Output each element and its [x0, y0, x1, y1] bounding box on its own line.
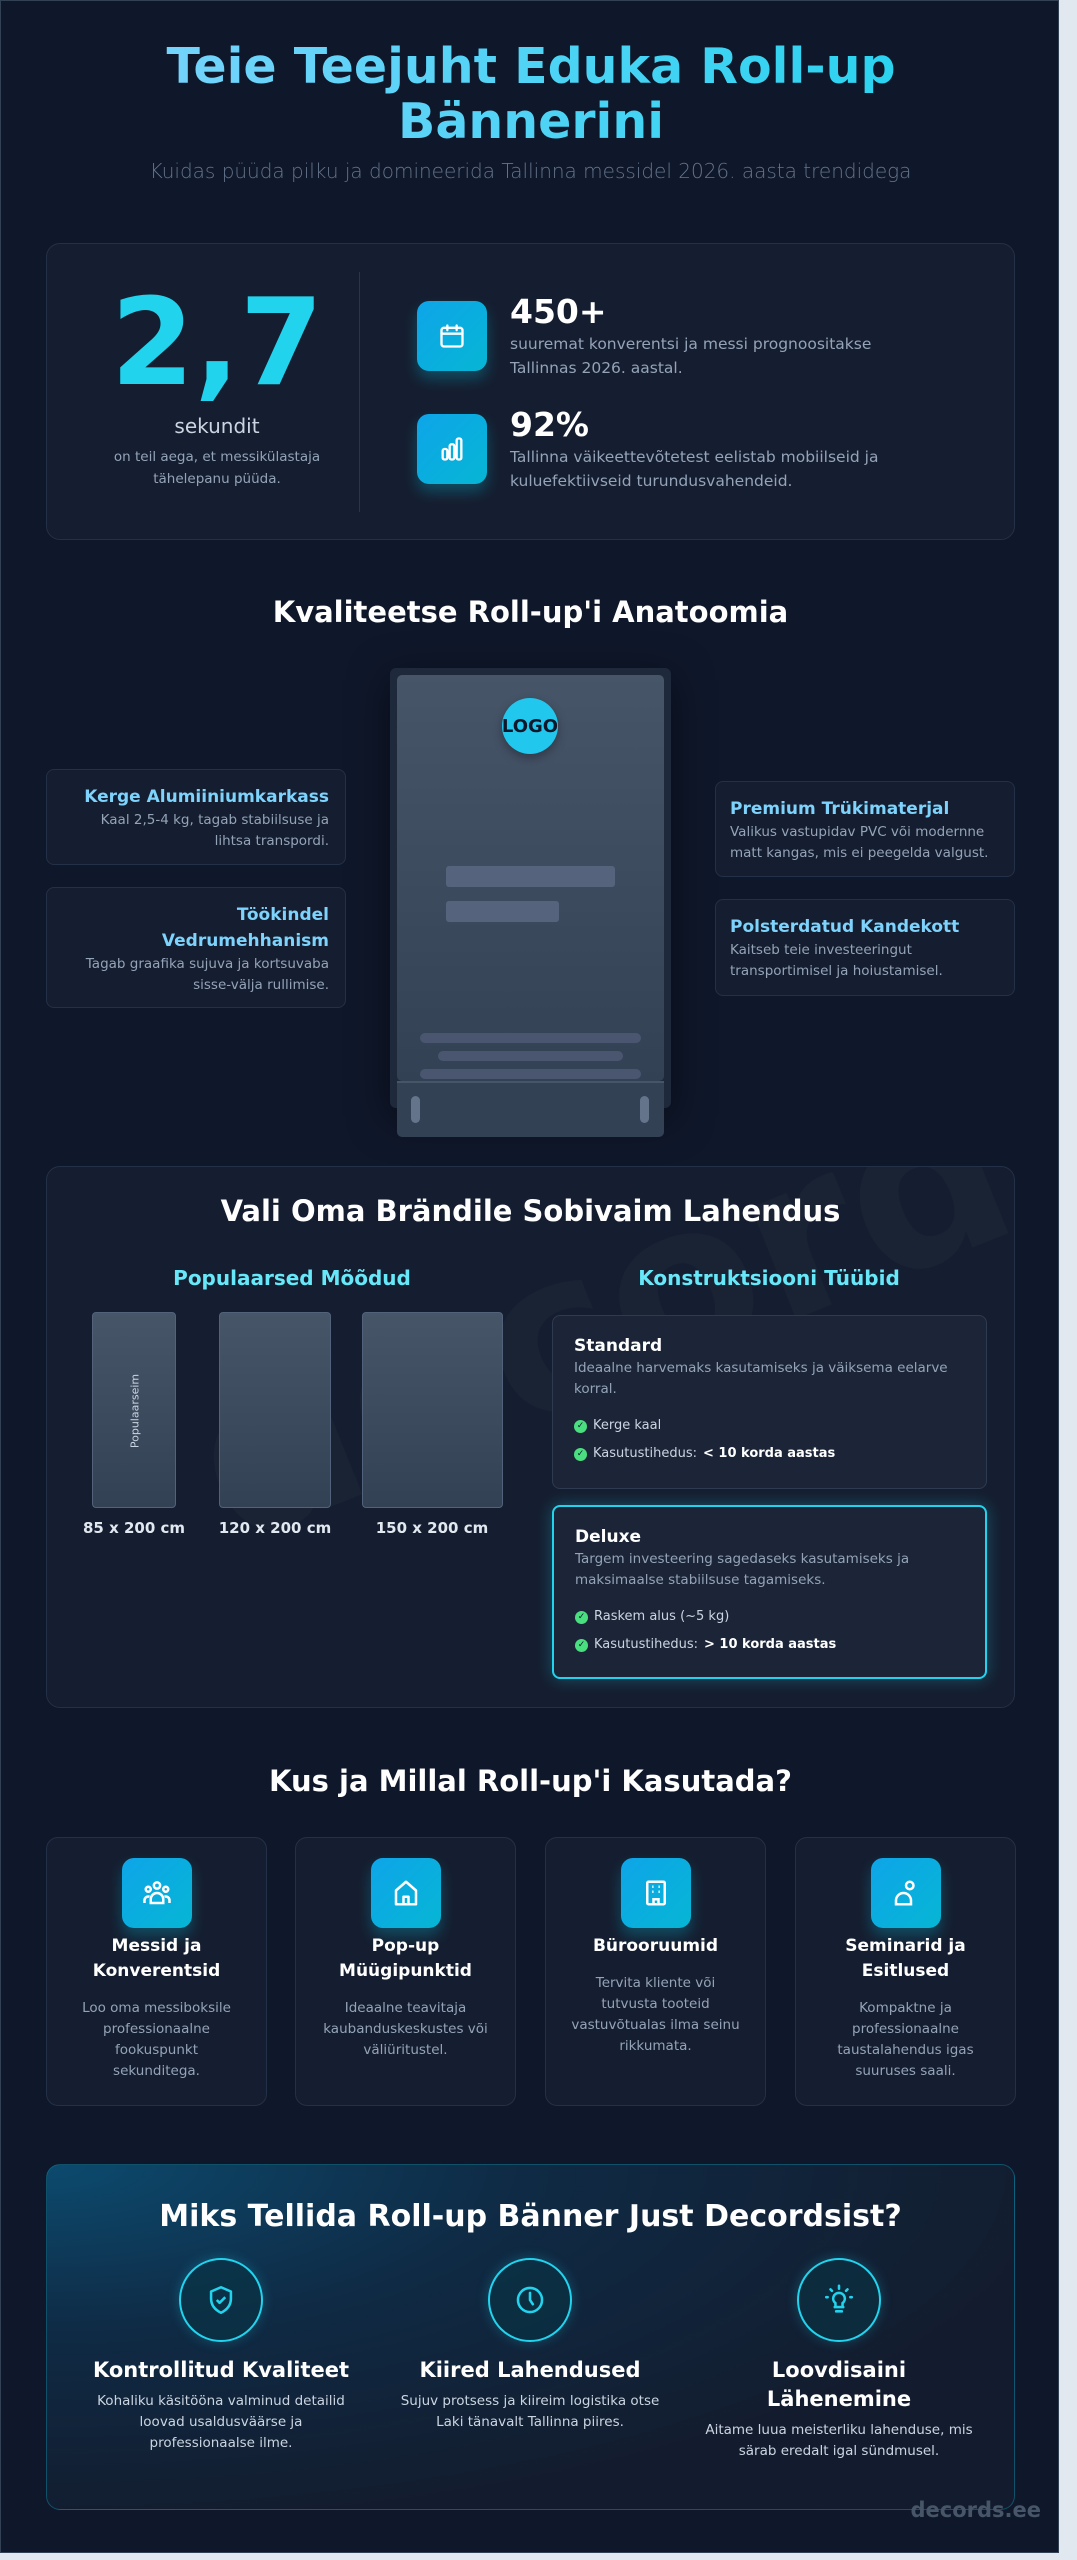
- card: fairs: Messid ja Konverentsid: [93, 1936, 220, 1981]
- stat 92%: kuluefektiivseid turundusvahendeid.: [510, 472, 792, 490]
- card: fairs: Loo oma messiboksile professionaalne fookuspunkt sekunditega.: [82, 2000, 231, 2079]
- stat 450+: [510, 292, 871, 377]
- chart: size 150: [362, 1312, 503, 1508]
- card: deluxe: ✓: [578, 1612, 585, 1622]
- chart: size 85: [92, 1312, 176, 1508]
- feature: quality: [93, 2254, 349, 2451]
- callout: spring mechanism: Töökindel Vedrumehhanism: [162, 905, 329, 951]
- feature: quality: Kohaliku käsitööna valminud detailid loovad usaldusväärse ja professionaalse ilme.: [97, 2393, 345, 2451]
- callout: carry bag: [715, 899, 1015, 996]
- label: 120: 120 x 200 cm: [219, 1519, 331, 1537]
- callout: aluminium frame: Kerge Alumiiniumkarkass: [84, 787, 329, 807]
- card: pop-up: Ideaalne teavitaja kaubanduskeskustes või väliüritustel.: [323, 2000, 488, 2058]
- subtitle: Kuidas püüda pilku ja domineerida Tallinna messidel 2026. aasta trendidega: [150, 159, 911, 183]
- card: standard: ✓: [577, 1421, 584, 1431]
- label: 150: 150 x 200 cm: [376, 1519, 488, 1537]
- card: standard: [552, 1315, 987, 1489]
- feature: creative: Aitame luua meisterliku lahenduse, mis särab eredalt igal sündmusel.: [705, 2422, 973, 2459]
- card: seminars: Seminarid ja Esitlused: [845, 1936, 966, 1981]
- heading: where to use: Kus ja Millal Roll-up'i Kasutada?: [269, 1764, 792, 1798]
- footer: brand: decords.ee: [910, 2498, 1041, 2522]
- heading: why decords: Miks Tellida Roll-up Bänner Just Decordsist?: [159, 2199, 902, 2234]
- card: standard: < 10 korda aastas: [703, 1446, 835, 1461]
- feature: quality: Kontrollitud Kvaliteet: [93, 2358, 349, 2382]
- callout: print material: Valikus vastupidav PVC või modernne matt kangas, mis ei peegelda valgust.: [730, 824, 988, 861]
- heading: choose solution: Vali Oma Brändile Sobivaim Lahendus: [221, 1194, 840, 1228]
- callout: print material: Premium Trükimaterjal: [730, 799, 949, 819]
- card: deluxe: Targem investeering sagedaseks kasutamiseks ja maksimaalse stabiilsuse tagamiseks.: [575, 1551, 909, 1588]
- panel: choose solution: [46, 1166, 1015, 1708]
- chart: size 120: [219, 1312, 331, 1508]
- stat 92%: 92%: [510, 405, 589, 444]
- logo circle: [502, 698, 558, 754]
- icon: presenter: [871, 1858, 941, 1928]
- feature: speed: Kiired Lahendused: [419, 2358, 641, 2382]
- icon: bar chart: [417, 414, 487, 484]
- icon: calendar: [417, 301, 487, 371]
- feature: creative: Loovdisaini Lähenemine: [767, 2358, 911, 2411]
- card: deluxe: Kasutustihedus:: [594, 1637, 698, 1652]
- logo circle: LOGO: [502, 716, 558, 736]
- stat 450+: suuremat konverentsi ja messi prognoositakse: [510, 335, 871, 353]
- icon: clock: [488, 2258, 572, 2342]
- icon: shield: [179, 2258, 263, 2342]
- big stat 2,7: [111, 274, 323, 487]
- icon: house: [371, 1858, 441, 1928]
- stat 450+: 450+: [510, 292, 607, 331]
- card: pop-up: Pop-up Müügipunktid: [339, 1936, 472, 1981]
- card: standard: Kasutustihedus:: [593, 1446, 697, 1461]
- heading: anatomy: Kvaliteetse Roll-up'i Anatoomia: [273, 595, 788, 629]
- stat 450+: Tallinnas 2026. aastal.: [510, 359, 683, 377]
- callout: carry bag: Polsterdatud Kandekott: [730, 917, 959, 937]
- chart: size 85: Populaarseim: [128, 1374, 142, 1448]
- card: offices: Bürooruumid: [593, 1936, 718, 1956]
- callout: spring mechanism: Tagab graafika sujuva ja kortsuvaba sisse-välja rullimise.: [86, 956, 329, 993]
- feature: speed: Sujuv protsess ja kiireim logistika otse Laki tänavalt Tallinna piires.: [401, 2393, 659, 2430]
- card: standard: ✓: [577, 1449, 584, 1459]
- illustration: roll-up banner: [384, 668, 677, 1137]
- card: deluxe: Raskem alus (~5 kg): [594, 1609, 729, 1624]
- panel: stats: [46, 243, 1015, 540]
- callout: print material: [715, 781, 1015, 877]
- card: offices: Tervita kliente või tutvusta tooteid vastuvõtualas ilma seinu rikkumata.: [571, 1975, 740, 2054]
- card: deluxe: > 10 korda aastas: [704, 1637, 836, 1652]
- big stat 2,7: tähelepanu püüda.: [153, 471, 281, 487]
- big stat 2,7: on teil aega, et messikülastaja: [114, 449, 320, 465]
- card: fairs: [46, 1837, 267, 2106]
- card: pop-up: [295, 1837, 516, 2106]
- title: Teie Teejuht Eduka Roll-up Bännerini: [166, 38, 896, 150]
- big stat 2,7: sekundit: [174, 414, 260, 438]
- card: seminars: [795, 1837, 1016, 2106]
- subheading: sizes: Populaarsed Mõõdud: [173, 1266, 411, 1290]
- stat 92%: [510, 405, 878, 490]
- callout: aluminium frame: Kaal 2,5-4 kg, tagab stabiilsuse ja lihtsa transpordi.: [101, 812, 329, 849]
- card: deluxe: [552, 1505, 987, 1679]
- card: deluxe: ✓: [578, 1640, 585, 1650]
- callout: aluminium frame: [46, 769, 346, 865]
- subheading: types: Konstruktsiooni Tüübid: [638, 1266, 900, 1290]
- card: deluxe: Deluxe: [575, 1527, 641, 1547]
- card: standard: Ideaalne harvemaks kasutamiseks ja väiksema eelarve korral.: [574, 1360, 948, 1397]
- card: offices: [545, 1837, 766, 2106]
- card: standard: Kerge kaal: [593, 1418, 661, 1433]
- callout: carry bag: Kaitseb teie investeeringut transportimisel ja hoiustamisel.: [730, 942, 943, 979]
- big stat 2,7: 2,7: [111, 274, 323, 413]
- icon: people: [122, 1858, 192, 1928]
- icon: building: [621, 1858, 691, 1928]
- stat 92%: Tallinna väikeettevõtetest eelistab mobiilseid ja: [510, 448, 878, 466]
- feature: speed: [401, 2254, 659, 2430]
- panel: why decords: [46, 2164, 1015, 2510]
- callout: spring mechanism: [46, 887, 346, 1008]
- card: seminars: Kompaktne ja professionaalne taustalahendus igas suuruses saali.: [837, 2000, 974, 2079]
- icon: light bulb: [797, 2258, 881, 2342]
- feature: creative: [705, 2254, 973, 2459]
- label: 85: 85 x 200 cm: [83, 1519, 185, 1537]
- card: standard: Standard: [574, 1336, 662, 1356]
